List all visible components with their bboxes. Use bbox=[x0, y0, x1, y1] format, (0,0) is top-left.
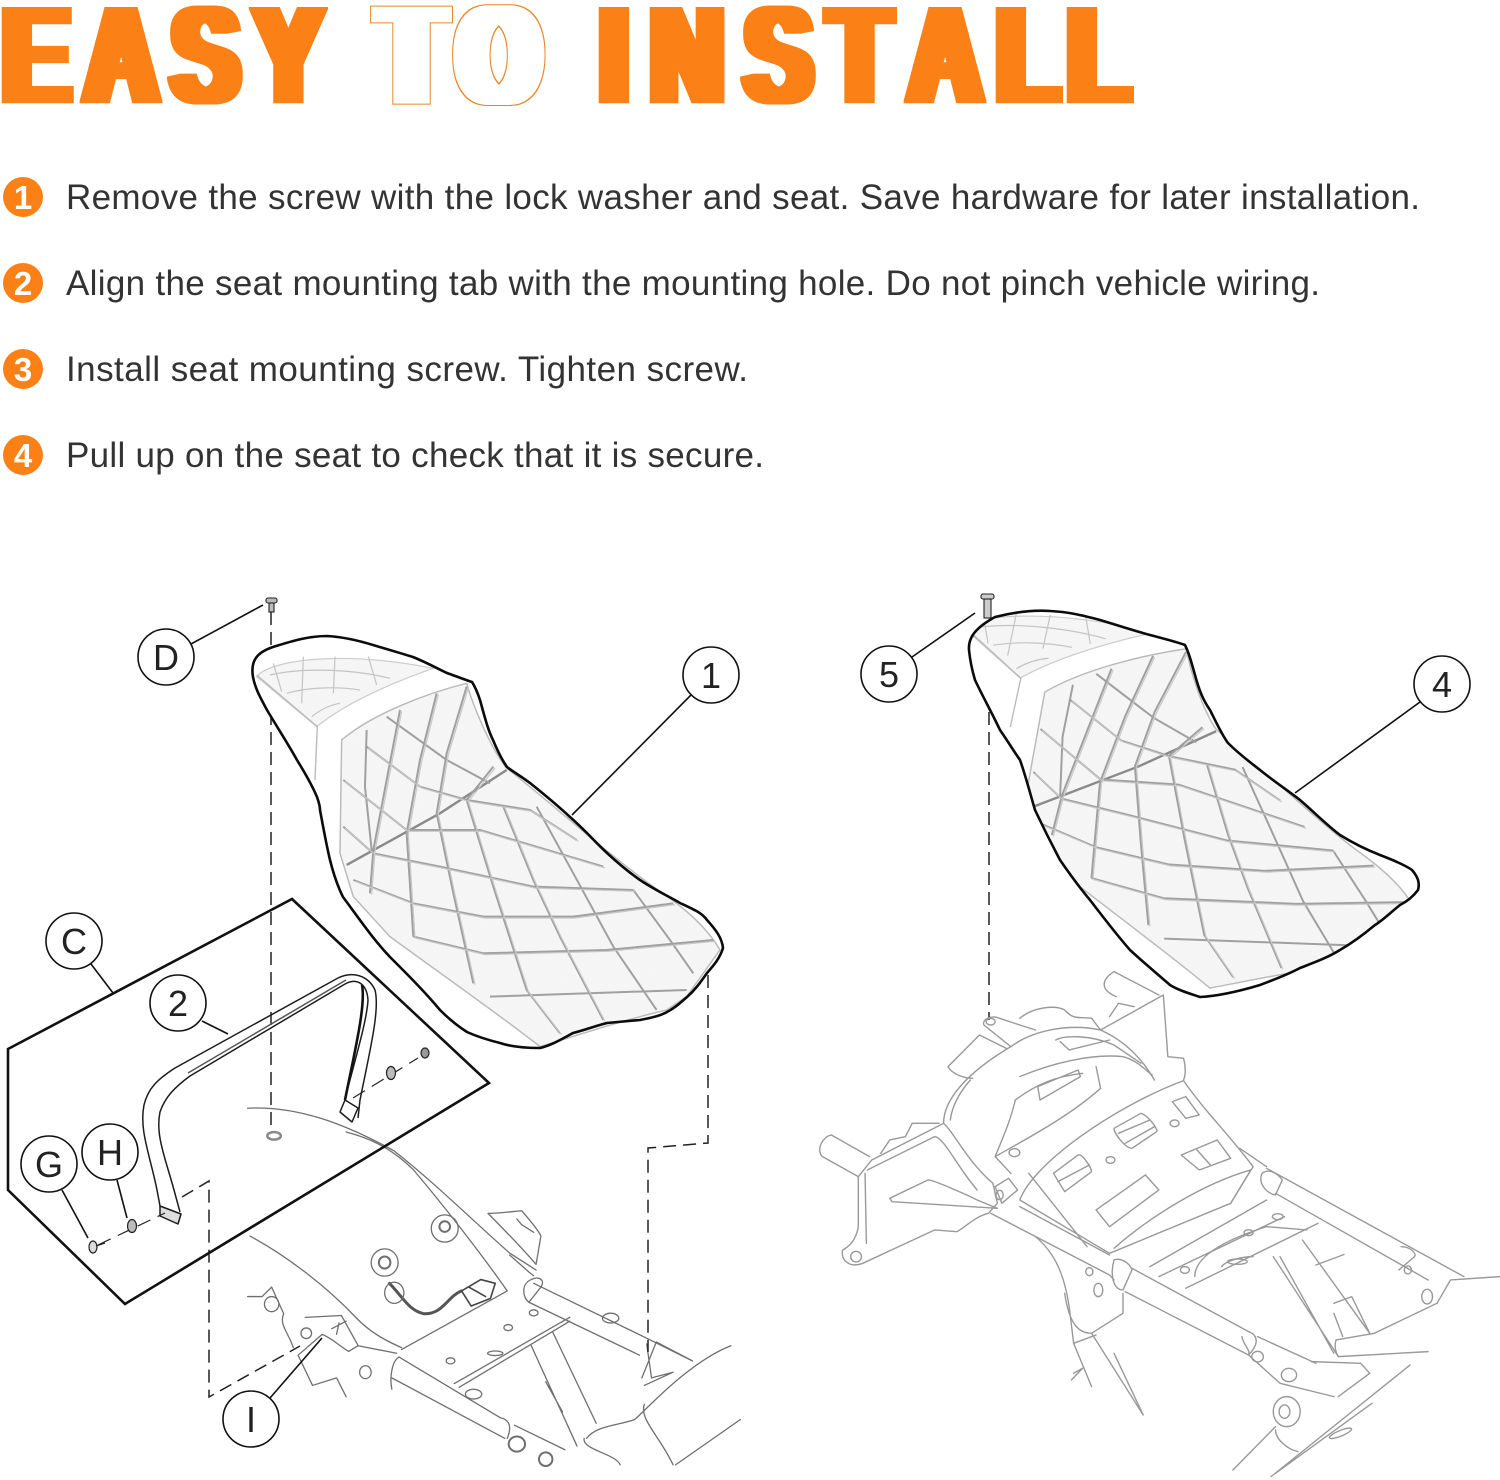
dashed guide: strap to frame bbox=[182, 1181, 300, 1397]
callout 5: 5 bbox=[879, 654, 899, 695]
screw 5 bbox=[981, 594, 994, 618]
step 3: 3 bbox=[14, 351, 32, 388]
dashed guide: left seat screw bbox=[270, 612, 272, 1132]
callout G: G bbox=[35, 1144, 63, 1185]
callout 1: 1 bbox=[701, 655, 721, 696]
right seat fill bbox=[969, 611, 1419, 997]
step 1: Remove the screw with the lock washer and seat. Save hardware for later installation. bbox=[66, 178, 1420, 217]
step 4: 4 bbox=[14, 437, 33, 474]
seat outline stroke bbox=[252, 636, 723, 1048]
dashed guide: seat nose to frame bbox=[648, 975, 708, 1352]
screw D bbox=[266, 598, 277, 612]
title bbox=[3, 0, 1129, 134]
callout C: C bbox=[61, 921, 87, 962]
callout C bbox=[46, 913, 113, 993]
seat outline fill bbox=[252, 636, 723, 1048]
right seat outline bbox=[969, 611, 1419, 997]
callout 2: 2 bbox=[168, 983, 188, 1024]
step 1: 1 bbox=[14, 179, 32, 216]
callout I bbox=[223, 1338, 322, 1447]
right diagram: frame bbox=[820, 972, 1500, 1477]
callout 1 bbox=[572, 647, 739, 815]
step 4: Pull up on the seat to check that it is secure. bbox=[66, 436, 764, 475]
dashed guide: right seat screw bbox=[988, 712, 990, 1020]
callout G bbox=[21, 1136, 88, 1238]
callout 4 bbox=[1295, 656, 1470, 793]
callout I: I bbox=[246, 1399, 256, 1440]
hardware: washers and screws in box bbox=[89, 1048, 429, 1253]
left diagram: fender and frame bbox=[248, 1108, 740, 1466]
callout H bbox=[82, 1124, 138, 1218]
callout 2 bbox=[150, 975, 228, 1034]
step 3: Install seat mounting screw. Tighten screw. bbox=[66, 350, 748, 389]
step 2: Align the seat mounting tab with the mounting hole. Do not pinch vehicle wiring. bbox=[66, 264, 1320, 303]
step 2: 2 bbox=[14, 265, 32, 302]
right seat bbox=[968, 609, 1420, 998]
callout D bbox=[138, 605, 263, 685]
left seat bbox=[252, 636, 723, 1048]
callout 5 bbox=[861, 613, 975, 702]
kit detail box bbox=[8, 899, 489, 1304]
strap bbox=[143, 975, 376, 1224]
callout H: H bbox=[97, 1132, 123, 1173]
callout D: D bbox=[153, 637, 179, 678]
callout 4: 4 bbox=[1432, 664, 1452, 705]
